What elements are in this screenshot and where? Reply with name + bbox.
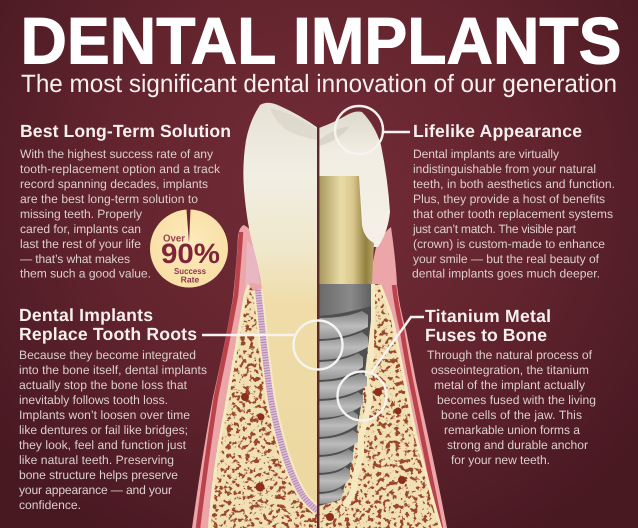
body text: record spanning decades, implants (20, 177, 208, 191)
body text: Because they become integrated (19, 348, 196, 362)
heading: Titanium Metal (425, 306, 551, 326)
panel: lifelike appearance (412, 121, 615, 280)
jaw bone (200, 280, 450, 528)
body text: Implants won’t loosen over time (19, 408, 190, 422)
body text: that other tooth replacement systems (413, 207, 613, 221)
body text (427, 348, 596, 467)
body text: actually stop the bone loss that (19, 378, 188, 392)
body text: them such a good value. (20, 266, 151, 280)
heading: Replace Tooth Roots (19, 324, 197, 344)
callout: titanium fuses (338, 317, 424, 420)
body text: osseointegration, the titanium (431, 363, 589, 377)
body text: last the rest of your life (20, 237, 141, 251)
body text: — that’s what makes (20, 252, 130, 266)
badge: over 90% success rate: Over (163, 234, 185, 244)
body text (412, 147, 615, 280)
badge: over 90% success rate: Success (174, 266, 206, 276)
body text: Through the natural process of (427, 348, 593, 362)
body text: becomes fused with the living (437, 393, 596, 407)
heading (425, 306, 551, 345)
body text: Dental implants are virtually (413, 147, 560, 161)
heading: Dental Implants (19, 305, 153, 325)
body text: bone cells of the jaw. This (441, 408, 582, 422)
tooth cusp shading (270, 108, 318, 140)
implant crown, right half (319, 112, 390, 247)
body text: inevitably follows tooth loss. (19, 393, 168, 407)
body text: dental implants goes much deeper. (412, 266, 600, 280)
body text: are the best long-term solution to (20, 192, 198, 206)
body text: confidence. (19, 498, 81, 512)
badge: over 90% success rate (150, 210, 228, 288)
panel: best long-term solution (20, 121, 231, 280)
gum tissue left (192, 225, 318, 528)
body text: for your new teeth. (451, 453, 550, 467)
implant body (319, 284, 371, 506)
body text: just can’t match. The visible part (412, 222, 577, 236)
implant threads cream border (345, 284, 372, 506)
body text: cared for, implants can (20, 222, 141, 236)
badge: over 90% success rate: 90% (161, 238, 220, 269)
panel: dental implants replace tooth roots (19, 305, 207, 512)
body text: bone structure helps preserve (19, 468, 178, 482)
heading: Best Long-Term Solution (20, 121, 231, 141)
panel: titanium metal fuses to bone (425, 306, 596, 467)
body text (19, 348, 207, 512)
callout: tooth roots (202, 320, 342, 370)
subtitle: The most significant dental innovation of our generation (21, 70, 617, 98)
natural tooth, left half (243, 103, 318, 505)
body text: metal of the implant actually (434, 378, 586, 392)
body text: remarkable union forms a (444, 423, 580, 437)
body text: they look, feel and function just (19, 438, 187, 452)
gum dark stripe left (198, 232, 241, 528)
body text: With the highest success rate of any (20, 147, 214, 161)
body text: Plus, they provide a host of benefits (413, 192, 605, 206)
body text: tooth-replacement option and a track (20, 162, 221, 176)
centre divider (317, 124, 319, 528)
gum tissue right (318, 227, 447, 528)
callout: lifelike appearance (335, 106, 410, 154)
body text: (crown) is custom-made to enhance (413, 237, 605, 251)
body text: missing teeth. Properly (20, 207, 143, 221)
gold abutment (319, 176, 374, 284)
crown cusp shading (319, 126, 350, 146)
body text: like natural teeth. Preserving (19, 453, 174, 467)
body text (20, 147, 221, 280)
periodontal ligament (257, 290, 318, 511)
heading: Fuses to Bone (425, 325, 547, 345)
body text: teeth, in both aesthetics and function. (413, 177, 615, 191)
body text: indistinguishable from your natural (413, 162, 596, 176)
badge: over 90% success rate: Rate (181, 274, 200, 284)
body text: into the bone itself, dental implants (19, 363, 207, 377)
body text: your appearance — and your (19, 483, 172, 497)
illustration: tooth and implant cross-section (192, 103, 450, 528)
gum inner lavender (245, 240, 260, 295)
body text: like dentures or fail like bridges; (19, 423, 188, 437)
body text: strong and durable anchor (447, 438, 588, 452)
heading (19, 305, 197, 344)
heading: Lifelike Appearance (413, 121, 582, 141)
body text: your smile — but the real beauty of (413, 252, 600, 266)
title: DENTAL IMPLANTS (20, 4, 622, 78)
gum dark stripe right (394, 285, 441, 528)
